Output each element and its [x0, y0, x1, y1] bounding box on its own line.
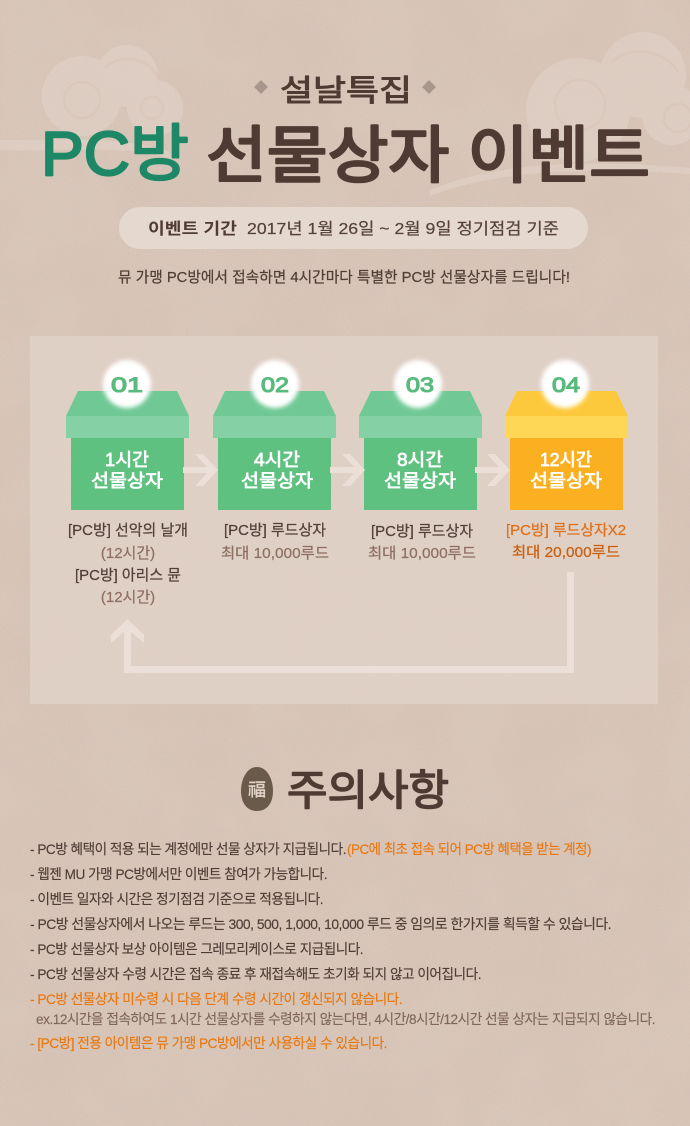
decorative cloud right: [430, 32, 690, 196]
step 3 box: 8시간: [397, 450, 443, 470]
arrow: 3 to 4: [475, 454, 510, 486]
note 2: - 웹젠 MU 가맹 PC방에서만 이벤트 참여가 가능합니다.: [30, 866, 327, 882]
step 4 rewards: [506, 522, 626, 561]
heading: 설날특집: [254, 75, 436, 108]
step 1 rewards: [68, 522, 188, 606]
step 3 rewards: [PC방] 루드상자: [371, 523, 473, 540]
step 3 box: [359, 360, 482, 510]
arrow: 2 to 3: [330, 454, 365, 486]
arrow: 1 to 2: [183, 454, 218, 486]
step 1 box: 01: [111, 374, 143, 397]
note 1 highlight: (PC에 최초 접속 되어 PC방 혜택을 받는 계정): [347, 841, 591, 857]
icon: left ornament: [254, 80, 268, 94]
step 2 rewards: [PC방] 루드상자: [224, 522, 326, 539]
event period pill: [119, 207, 588, 249]
step 3 box: 03: [406, 374, 434, 397]
icon: 福 stamp: 福: [248, 780, 266, 800]
title: [41, 120, 650, 191]
step 1 rewards: [PC방] 아리스 뮨: [75, 567, 181, 584]
step 3 rewards: 최대 10,000루드: [368, 545, 476, 562]
notes list: [30, 841, 655, 1051]
icon: 福 stamp: [241, 767, 273, 811]
caution title: 주의사항: [287, 767, 449, 814]
step 2 box: [213, 360, 336, 510]
panel: gift box steps: [30, 336, 658, 704]
step 4 box: 04: [552, 374, 580, 397]
note 7: - PC방 선물상자 미수령 시 다음 단계 수령 시간이 갱신되지 않습니다.: [30, 991, 402, 1007]
step 1 rewards: (12시간): [101, 589, 155, 606]
step 1 box: 1시간: [105, 450, 149, 470]
step 1 box: 선물상자: [91, 471, 163, 491]
step 1 rewards: [PC방] 선악의 날개: [68, 522, 188, 539]
title: PC방: PC방: [41, 120, 189, 189]
step 3 box: 선물상자: [384, 471, 456, 491]
step 2 rewards: [221, 522, 329, 562]
step 2 rewards: 최대 10,000루드: [221, 545, 329, 562]
step 4 box: [505, 360, 628, 510]
step 4 rewards: 최대 20,000루드: [512, 544, 620, 561]
arrow: loop back: [111, 572, 574, 673]
icon: right ornament: [422, 80, 436, 94]
period label: 이벤트 기간: [148, 220, 237, 238]
step 1 rewards: (12시간): [101, 545, 155, 562]
intro text: 뮤 가맹 PC방에서 접속하면 4시간마다 특별한 PC방 선물상자를 드립니다!: [118, 269, 570, 286]
step 4 box: 12시간: [540, 450, 592, 470]
decorative cloud left: [0, 45, 183, 158]
note 7 example: ex.12시간을 접속하여도 1시간 선물상자를 수령하지 않는다면, 4시간/8시간/12시간 선물 상자는 지급되지 않습니다.: [36, 1011, 655, 1027]
step 3 rewards: [368, 523, 476, 562]
note 5: - PC방 선물상자 보상 아이템은 그레모리케이스로 지급됩니다.: [30, 941, 363, 957]
note 4: - PC방 선물상자에서 나오는 루드는 300, 500, 1,000, 10,000 루드 중 임의로 한가지를 획득할 수 있습니다.: [30, 916, 611, 932]
note 3: - 이벤트 일자와 시간은 정기점검 기준으로 적용됩니다.: [30, 891, 323, 907]
step 2 box: 02: [261, 374, 289, 397]
title: 선물상자 이벤트: 선물상자 이벤트: [206, 122, 650, 191]
note 8: - [PC방] 전용 아이템은 뮤 가맹 PC방에서만 사용하실 수 있습니다.: [30, 1035, 387, 1051]
step 4 rewards: [PC방] 루드상자X2: [506, 522, 626, 539]
step 2 box: 선물상자: [241, 471, 313, 491]
period dates: 2017년 1월 26일 ~ 2월 9일 정기점검 기준: [247, 220, 559, 238]
step 2 box: 4시간: [254, 450, 300, 470]
heading: 주의사항: [241, 767, 449, 814]
subtitle text: 설날특집: [280, 75, 412, 108]
step 1 box: [66, 360, 189, 510]
step 4 box: 선물상자: [530, 471, 602, 491]
note 6: - PC방 선물상자 수령 시간은 접속 종료 후 재접속해도 초기화 되지 않고 이어집니다.: [30, 966, 481, 982]
note 1: - PC방 혜택이 적용 되는 계정에만 선물 상자가 지급됩니다.: [30, 841, 346, 857]
